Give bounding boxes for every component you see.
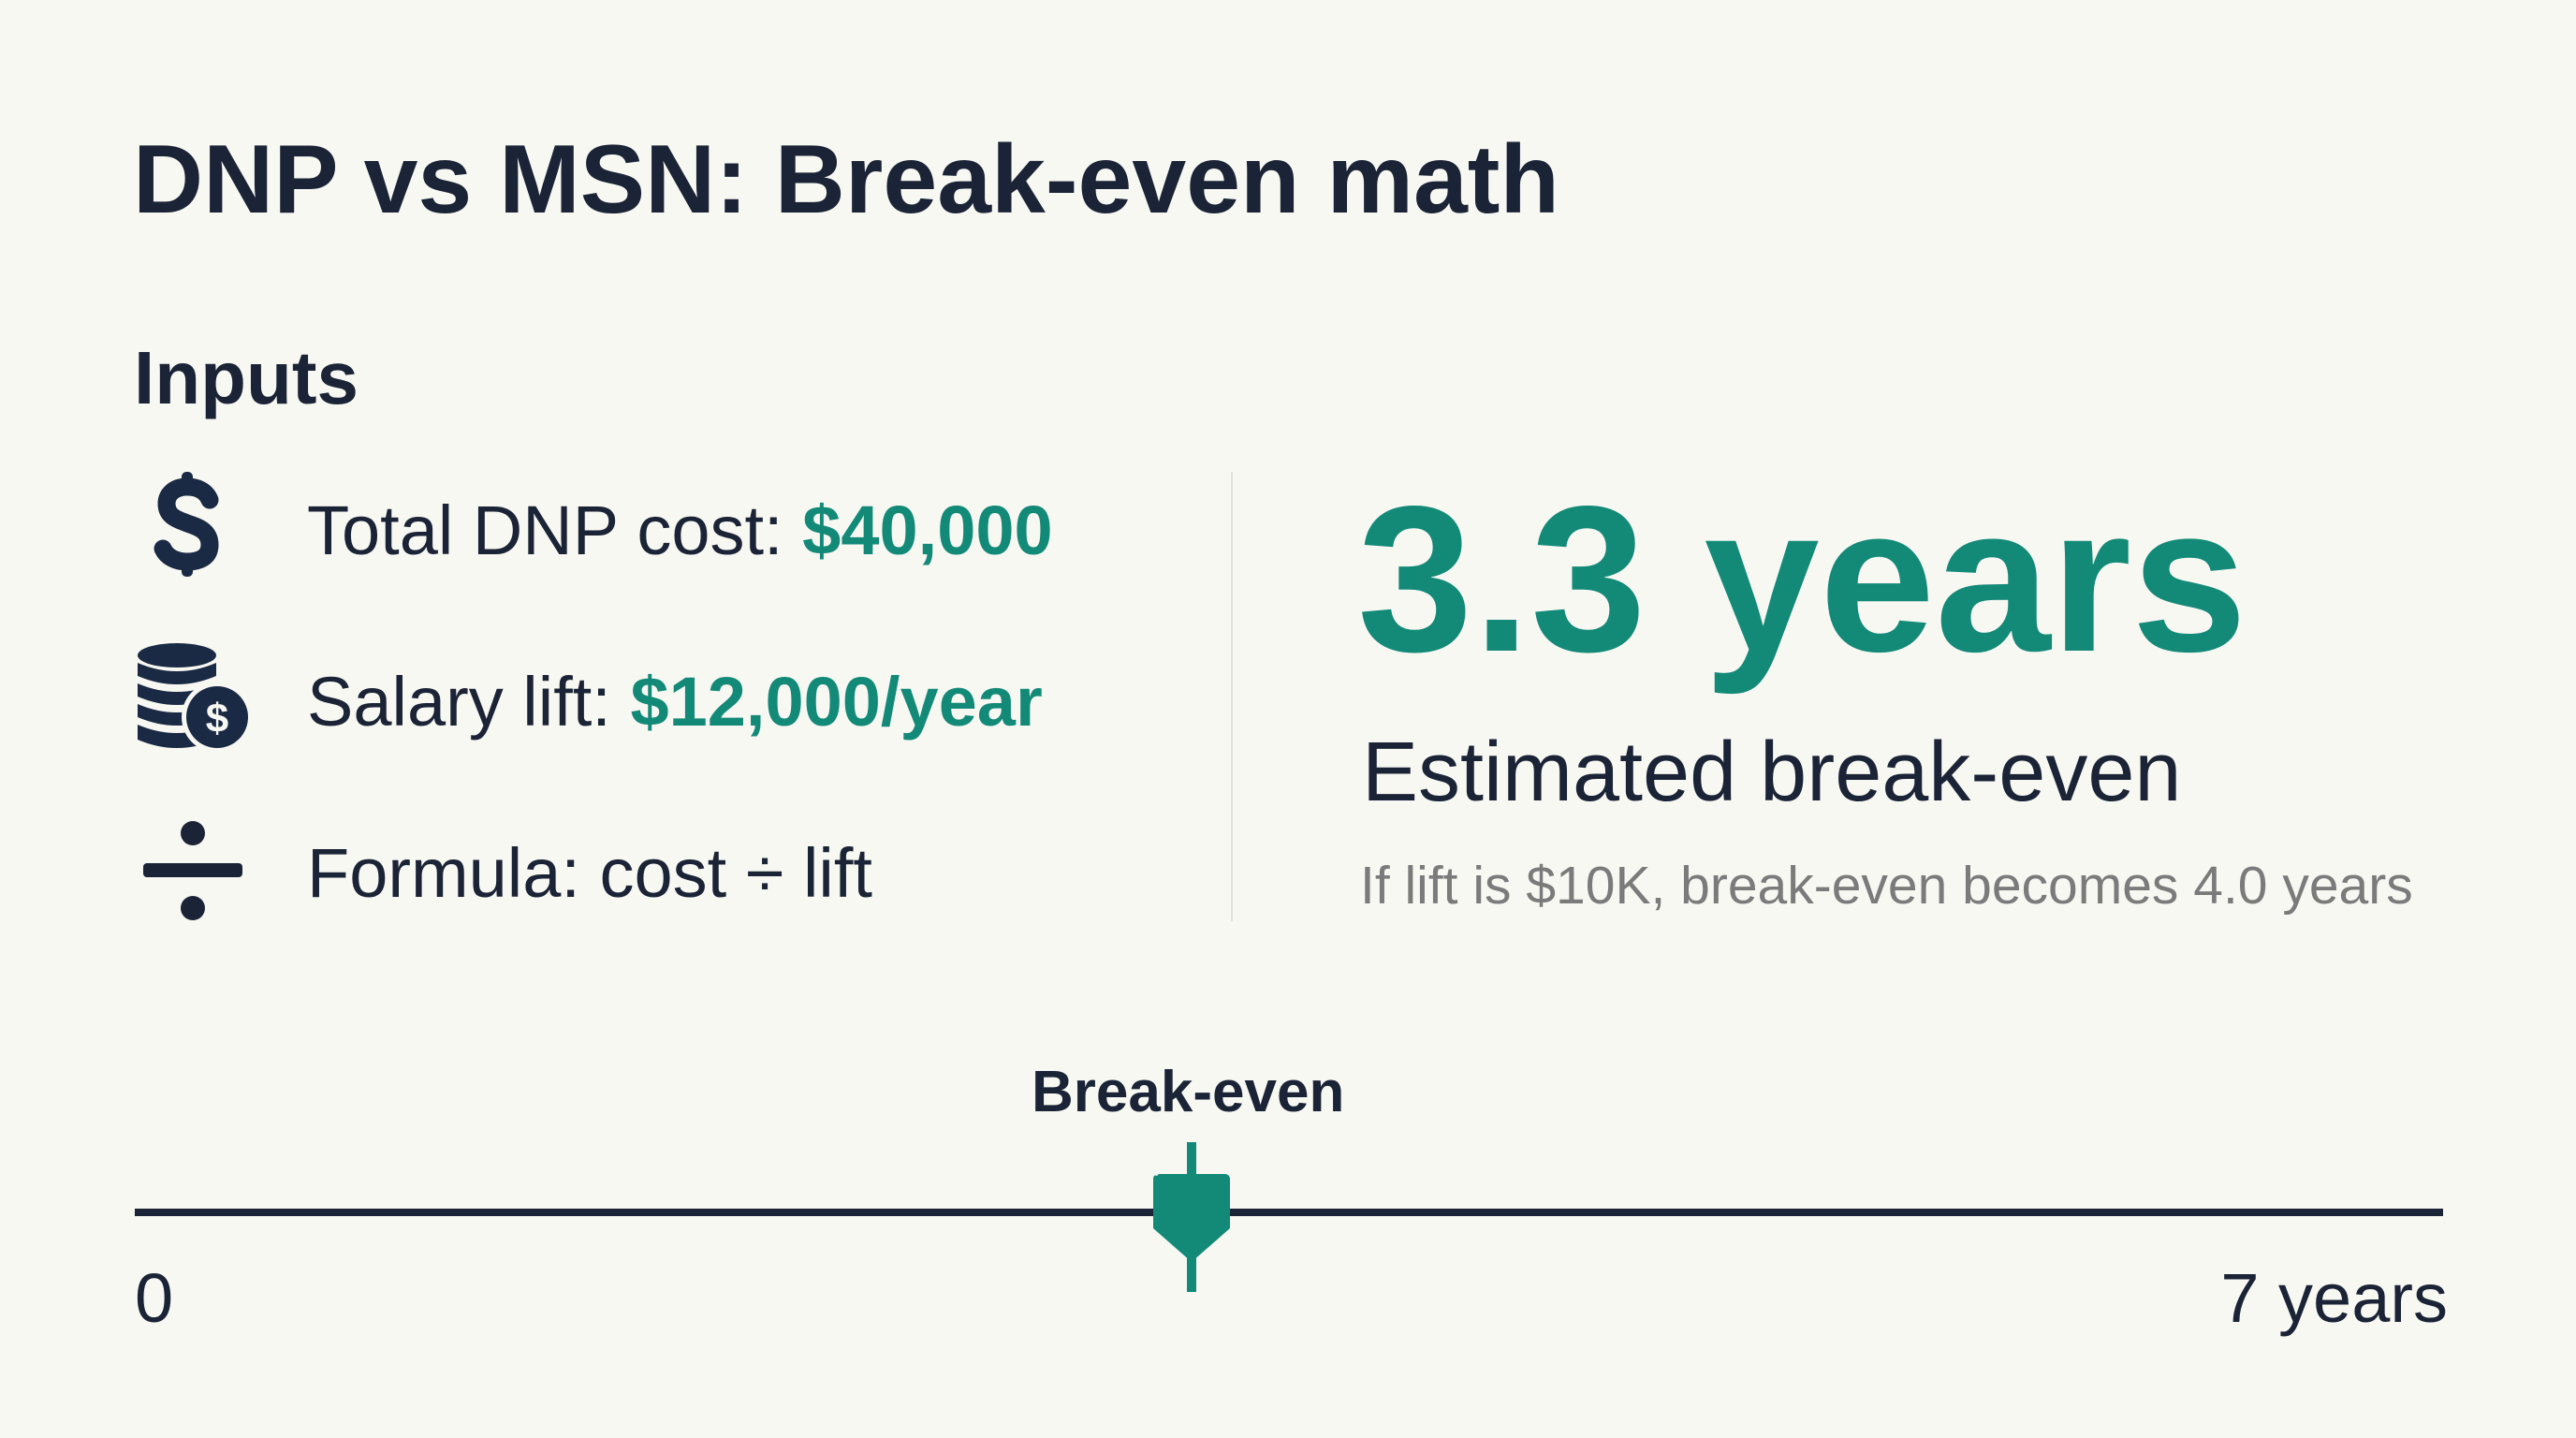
title: DNP vs MSN: Break-even math <box>133 125 1559 234</box>
icon: coins <box>138 643 248 748</box>
label: 0: 0 <box>135 1259 173 1337</box>
timeline <box>135 1060 2448 1337</box>
label: break-even: Break-even <box>1032 1060 1344 1124</box>
icon: divide <box>143 821 242 920</box>
text: salary lift: Salary lift: $12,000/year <box>307 663 1043 741</box>
result: big number: 3.3 years <box>1357 463 2247 696</box>
icon: coins: $ <box>206 696 228 741</box>
text: formula: Formula: cost ÷ lift <box>307 834 872 912</box>
icon: dollar <box>154 472 219 577</box>
text: total cost: Total DNP cost: $40,000 <box>307 492 1053 569</box>
panel: inputs <box>138 472 1053 920</box>
label: 7 years: 7 years <box>2220 1259 2448 1337</box>
note: If lift is $10K, break-even becomes 4.0 years <box>1360 856 2413 916</box>
heading: inputs: Inputs <box>134 336 359 419</box>
marker <box>1153 1142 1230 1292</box>
text: estimated break-even: Estimated break-even <box>1362 726 2181 819</box>
